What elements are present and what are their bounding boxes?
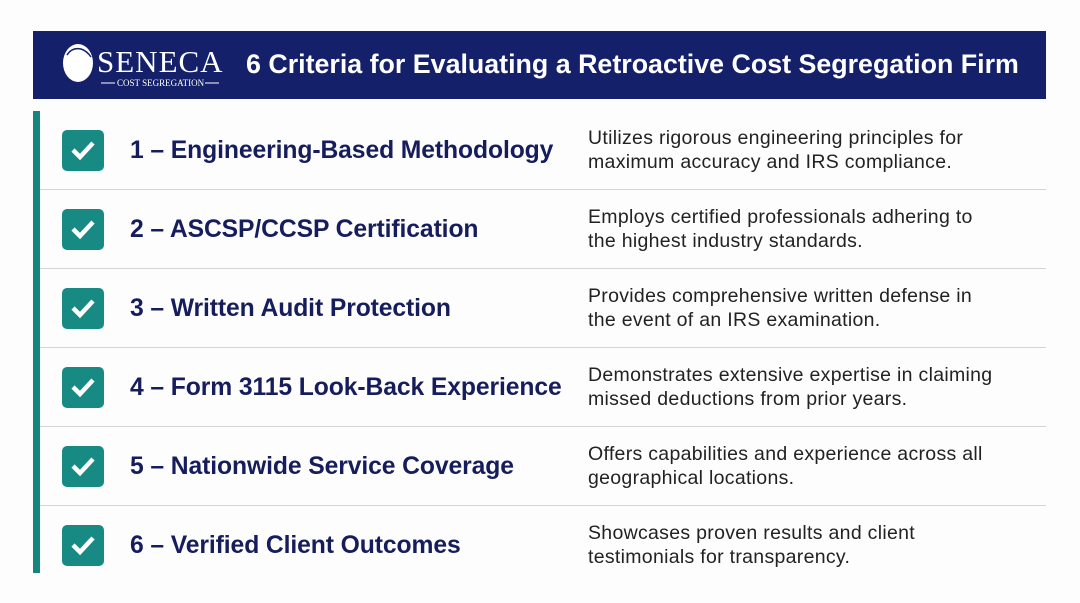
accent bar (33, 111, 40, 573)
row 1: 1 – Engineering-Based Methodology (130, 137, 553, 164)
row 2: Employs certified professionals adhering to the highest industry standards. (588, 206, 973, 252)
row 3: Provides comprehensive written defense in the event of an IRS examination. (588, 285, 972, 330)
logo: Seneca Cost Segregation: SENECA (97, 44, 224, 79)
row 6: 6 – Verified Client Outcomes (130, 532, 461, 559)
row 5: 5 – Nationwide Service Coverage (130, 453, 514, 480)
row 5: Offers capabilities and experience across all geographical locations. (588, 443, 983, 488)
row 6: Showcases proven results and client testimonials for transparency. (588, 522, 915, 568)
row 2 (40, 190, 1046, 269)
row 4: 4 – Form 3115 Look-Back Experience (130, 374, 562, 401)
row 1: Utilizes rigorous engineering principles for maximum accuracy and IRS compliance. (588, 127, 963, 172)
row 4: Demonstrates extensive expertise in claiming missed deductions from prior years. (588, 364, 992, 410)
row 3 (40, 269, 1046, 348)
logo: Seneca Cost Segregation (63, 44, 224, 88)
header banner (33, 31, 1046, 99)
criteria list (40, 127, 1046, 568)
row 4 (40, 348, 1046, 427)
title: 6 Criteria for Evaluating a Retroactive Cost Segregation Firm (246, 49, 1019, 79)
row 1 (40, 111, 1046, 190)
row 3: 3 – Written Audit Protection (130, 295, 451, 322)
logo: Seneca Cost Segregation: COST SEGREGATION (117, 78, 205, 88)
row 6 (62, 522, 915, 568)
row 2: 2 – ASCSP/CCSP Certification (130, 216, 478, 243)
row 5 (40, 427, 1046, 506)
